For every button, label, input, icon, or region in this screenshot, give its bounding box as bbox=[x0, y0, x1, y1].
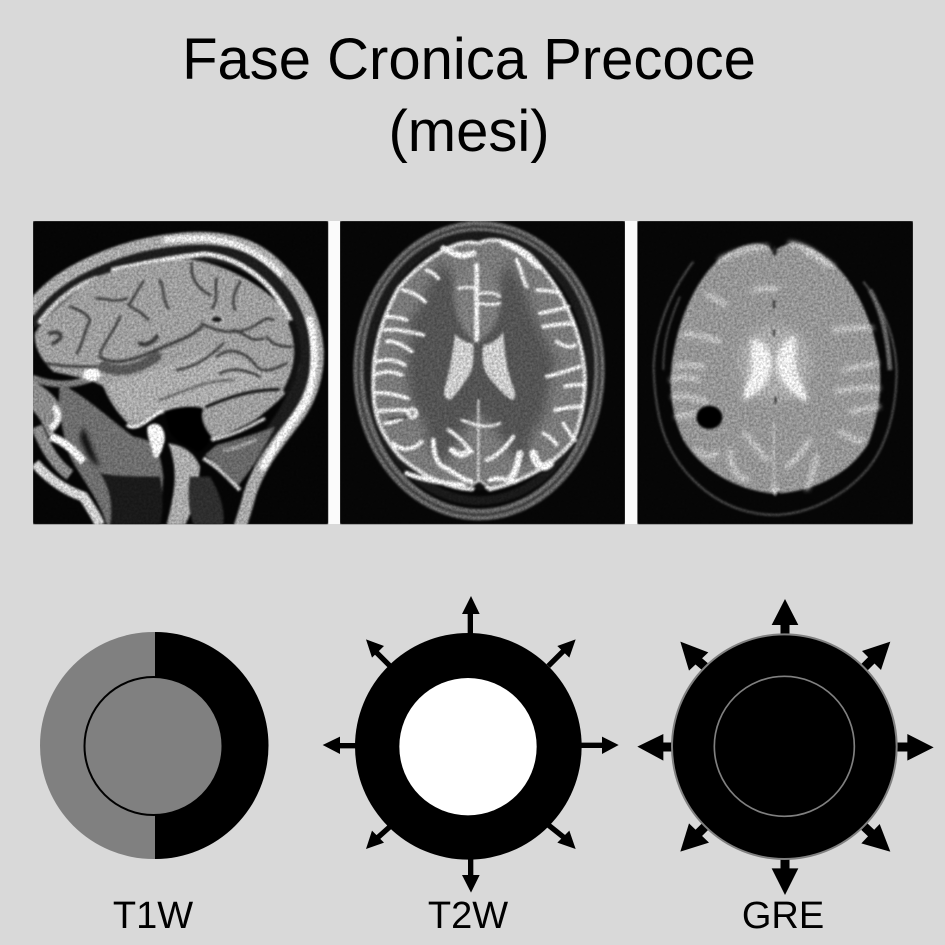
midline notch bbox=[472, 482, 486, 491]
head rings bbox=[358, 227, 600, 515]
sulci bbox=[47, 263, 297, 407]
white matter bbox=[406, 260, 557, 467]
cistern black void bbox=[162, 405, 213, 441]
panel: axial T2 MRI scan bbox=[340, 221, 625, 524]
panel: sagittal T1 MRI scan bbox=[30, 221, 328, 527]
brain stem and neck bbox=[167, 443, 200, 525]
label: T2W: T2W bbox=[428, 895, 508, 937]
midline marks bbox=[774, 300, 775, 403]
ventricles bbox=[444, 334, 474, 400]
title: (mesi) bbox=[388, 99, 550, 164]
diagram: GRE bbox=[637, 599, 934, 895]
ventricles bbox=[743, 338, 772, 401]
panel: axial GRE MRI scan bbox=[637, 221, 913, 524]
brain bbox=[35, 259, 299, 440]
scalp and skull bright bands bbox=[30, 238, 317, 527]
diagram: T2W bbox=[323, 596, 619, 893]
diagram: T1W bbox=[40, 632, 268, 859]
faint outer head rings bbox=[654, 262, 897, 515]
arrows outward bbox=[637, 599, 934, 895]
title bbox=[182, 27, 756, 164]
bright orbit spot and pituitary bbox=[83, 368, 100, 381]
white separators between scans bbox=[328, 221, 637, 524]
hemorrhage black blob bbox=[696, 406, 722, 429]
CSF sulci bbox=[375, 243, 583, 487]
label: GRE: GRE bbox=[742, 895, 824, 937]
lesion bbox=[406, 407, 418, 419]
bright white matter band bbox=[107, 350, 277, 420]
lesion bbox=[211, 316, 223, 323]
brain bbox=[373, 240, 585, 489]
label: T1W: T1W bbox=[113, 895, 193, 937]
title: Fase Cronica Precoce bbox=[182, 27, 756, 92]
periventricular glow bbox=[738, 325, 812, 402]
arrows outward bbox=[323, 596, 619, 893]
cortex brightening bbox=[672, 243, 878, 488]
brain bbox=[671, 243, 880, 493]
facial tissue bbox=[59, 383, 163, 525]
